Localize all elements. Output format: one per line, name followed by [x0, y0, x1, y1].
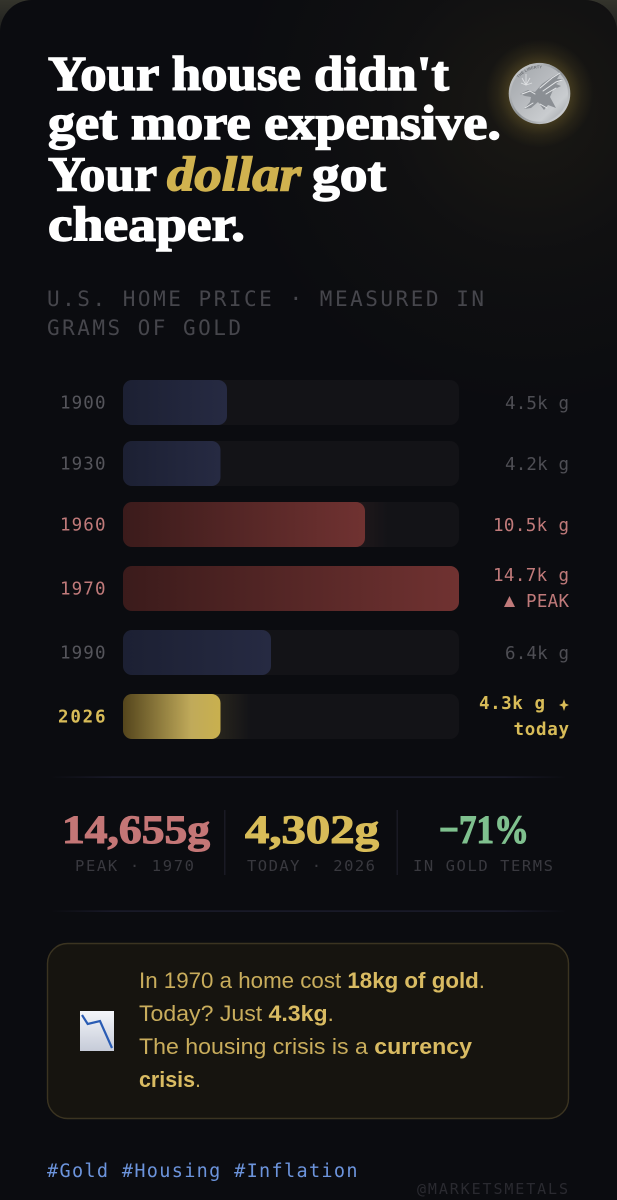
subtitle: U.S. HOME PRICE · MEASURED IN — [47, 287, 484, 311]
watermark: @MARKETSMETALS — [417, 1180, 568, 1198]
bar row: 2026: 2026 — [58, 708, 106, 728]
bar row: 1970: 1970 — [60, 580, 106, 600]
bar row: 1930: 4.2k g — [505, 455, 569, 475]
bar row: 2026 — [58, 694, 569, 740]
stat: peak — [62, 807, 210, 875]
subtitle — [47, 287, 484, 340]
callout text: The housing crisis is a currency — [139, 1034, 473, 1059]
stat: change: −71% — [439, 807, 529, 852]
title — [48, 46, 501, 252]
bar row: 1930: 1930 — [60, 454, 106, 474]
bar chart — [58, 380, 569, 740]
stat: change — [413, 807, 553, 875]
callout text — [139, 968, 485, 1092]
icon: silver eagle coin — [492, 46, 587, 140]
callout text: Today? Just 4.3kg. — [139, 1001, 334, 1026]
bar row: 1960 — [60, 502, 569, 547]
title: dollar — [167, 146, 302, 202]
bar row: 1960: 1960 — [60, 516, 106, 536]
bar row: 2026: 4.3k g — [479, 694, 545, 714]
title: get more expensive. — [48, 95, 501, 150]
bar row: 1970 — [60, 566, 569, 612]
title: got — [312, 146, 387, 202]
hashtags: #Gold #Housing #Inflation — [47, 1161, 358, 1182]
title: cheaper. — [48, 196, 245, 252]
bar row: 1930 — [60, 441, 569, 486]
stat: peak: 14,655g — [62, 807, 210, 852]
stat: peak: PEAK · 1970 — [75, 857, 194, 875]
title: Your house didn't — [48, 46, 450, 101]
bar row: 1970: PEAK — [526, 592, 569, 612]
bar row: 1900: 1900 — [60, 394, 106, 414]
stat: today — [245, 807, 379, 875]
subtitle: GRAMS OF GOLD — [47, 316, 241, 340]
title: Your — [48, 146, 157, 202]
bar row: 1990: 1990 — [60, 644, 106, 664]
bar row: 2026: today — [514, 720, 569, 740]
bar row: 1970: 14.7k g — [493, 566, 569, 586]
stat: today: 4,302g — [245, 807, 379, 852]
stat: today: TODAY · 2026 — [247, 857, 375, 875]
icon: chart with downward trend — [80, 1011, 114, 1051]
bar row: 1960: 10.5k g — [493, 516, 569, 536]
stat: change: IN GOLD TERMS — [413, 857, 553, 875]
callout text: In 1970 a home cost 18kg of gold. — [139, 968, 485, 993]
bar row: 1990 — [60, 630, 569, 675]
bar row: 1900: 4.5k g — [505, 394, 569, 414]
bar row: 1990: 6.4k g — [505, 644, 569, 664]
bar row: 1900 — [60, 380, 569, 425]
icon: silver eagle coin: THE LIBERTY — [516, 66, 542, 78]
callout text: crisis. — [139, 1067, 201, 1092]
stats row — [62, 807, 553, 875]
callout — [48, 944, 568, 1118]
